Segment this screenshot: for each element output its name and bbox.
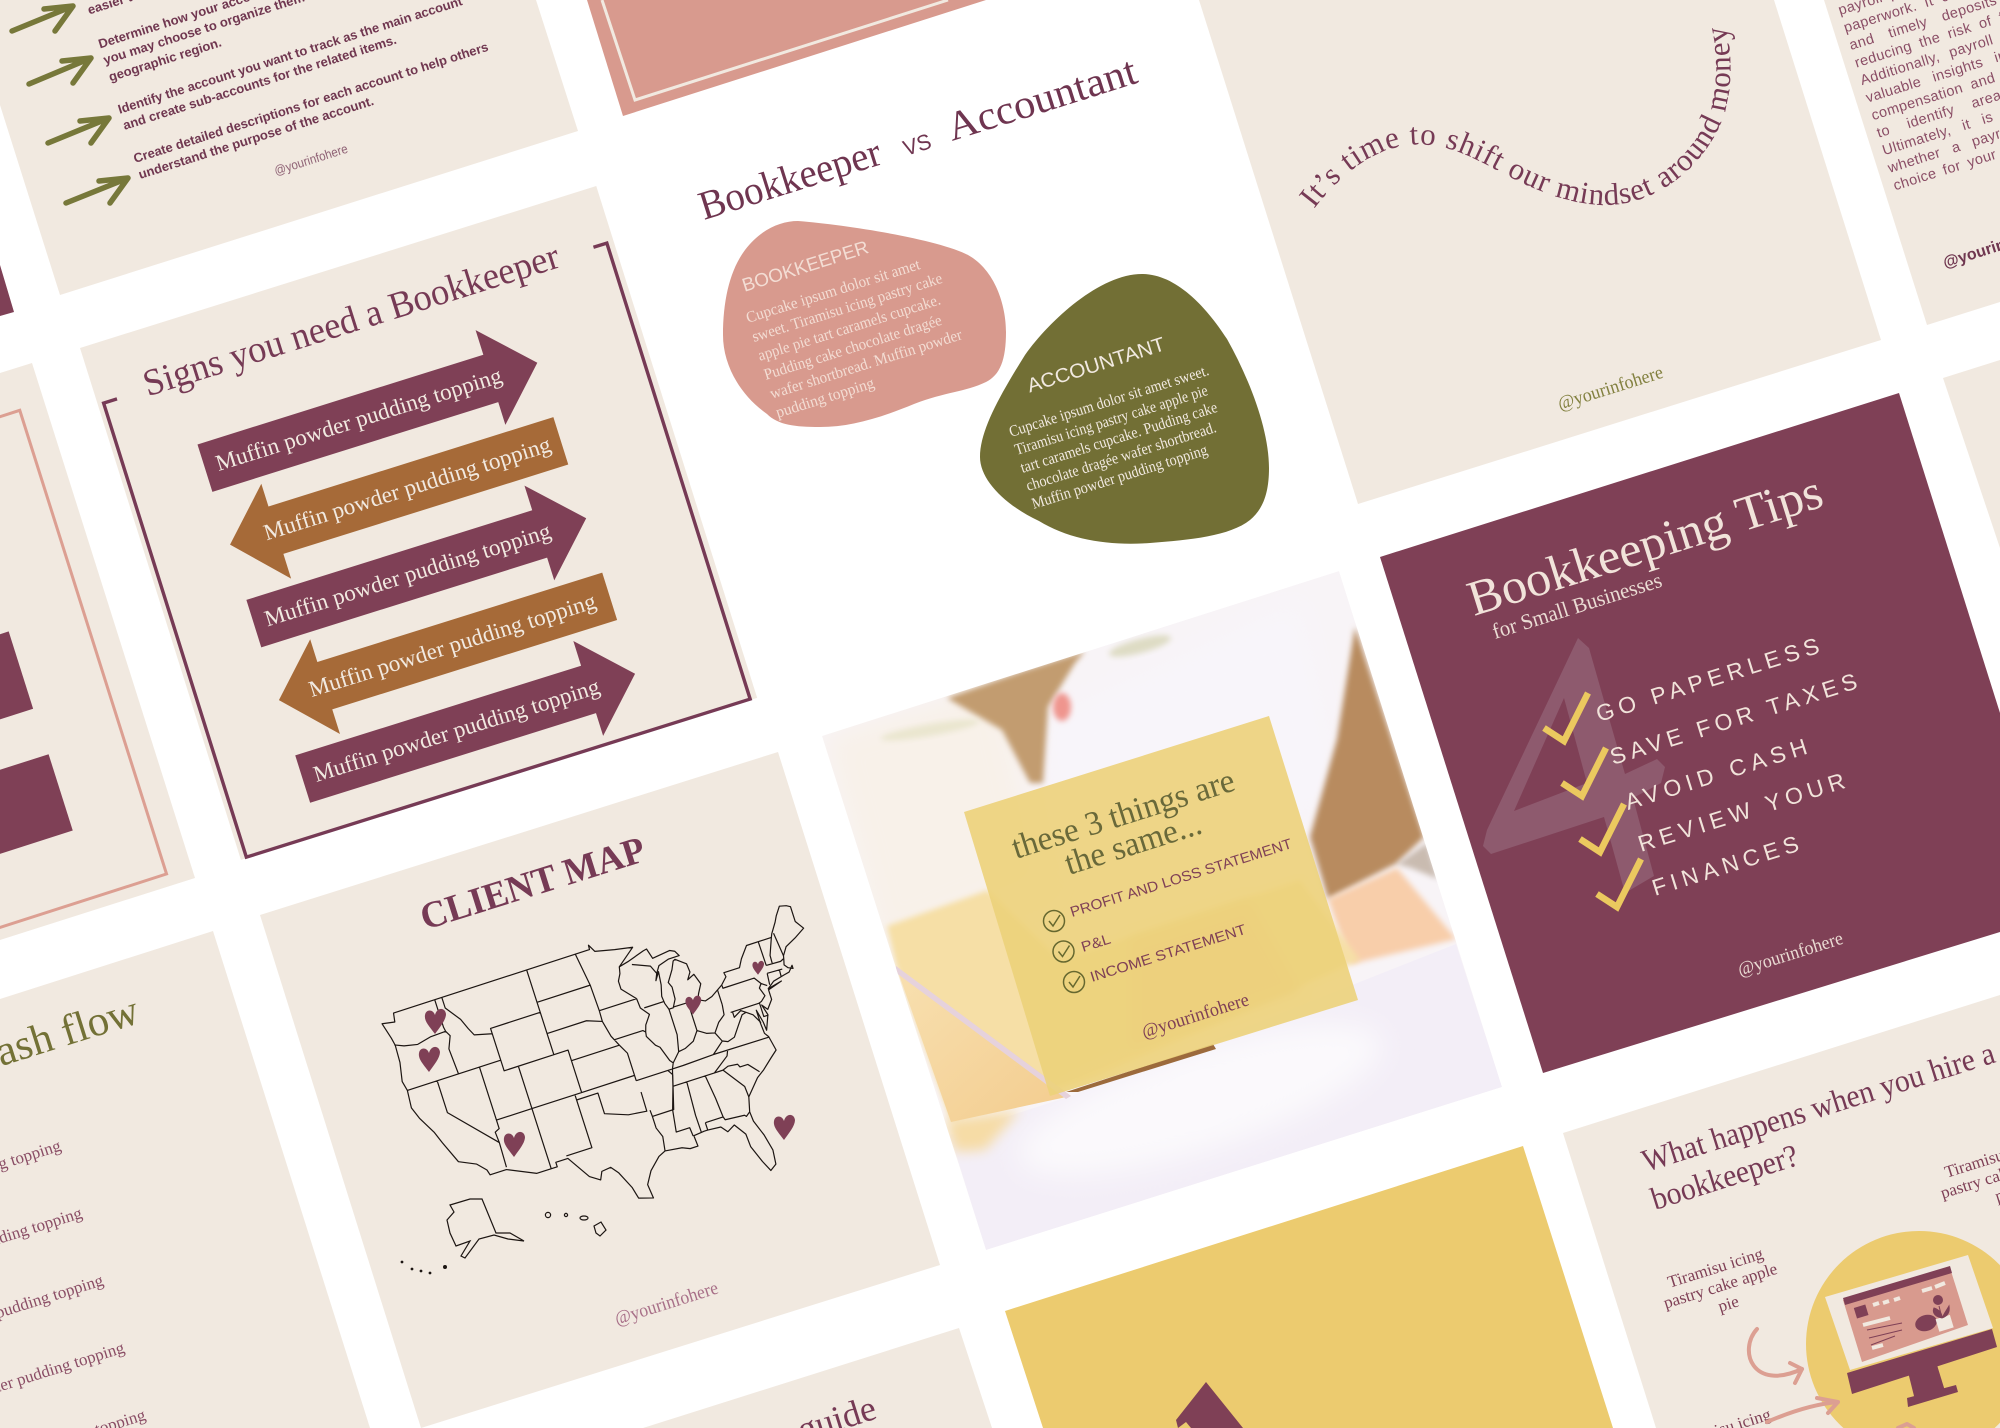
pink blob text xyxy=(734,218,971,422)
panel: photo with checklist xyxy=(822,571,1502,1250)
panel: right edge sliver card xyxy=(1943,360,2000,548)
arrow row 3 xyxy=(239,471,601,670)
maroon shape xyxy=(1176,1382,1243,1428)
pink blob text: Pudding cake chocolate dragée xyxy=(762,312,944,384)
panel: bookkeeper vs accountant xyxy=(693,48,1269,544)
pink blob text: sweet. Tiramisu icing pastry cake xyxy=(750,270,944,346)
overlay checklist: P&L xyxy=(1079,932,1113,956)
tips checks xyxy=(1544,693,1641,907)
tips title: Bookkeeping Tips xyxy=(1461,464,1829,626)
overlay checklist xyxy=(1068,836,1294,986)
list text: Create detailed descriptions for each account to help others xyxy=(132,39,490,166)
title xyxy=(693,48,1143,229)
tips list: REVIEW YOUR xyxy=(1635,768,1848,857)
client map heading: CLIENT MAP xyxy=(415,829,650,939)
yellow overlay xyxy=(964,716,1358,1096)
illustration circle xyxy=(1806,1231,2000,1428)
arrow row 1 xyxy=(190,315,552,515)
list text: @yourinfohere xyxy=(272,141,350,178)
callout text left: pastry cake apple xyxy=(1661,1259,1780,1312)
upper block xyxy=(0,631,33,806)
olive blob text: Muffin powder pudding topping xyxy=(1030,442,1210,513)
olive blob text: tart caramels cupcake. Pudding cake xyxy=(1018,399,1219,477)
check circles xyxy=(1044,910,1084,992)
tips handle: @yourinfohere xyxy=(1735,928,1846,981)
title: VS xyxy=(900,129,934,161)
monitor illustration xyxy=(1825,1255,1997,1407)
overlay checklist: INCOME STATEMENT xyxy=(1088,922,1248,986)
tips subtitle: for Small Businesses xyxy=(1489,567,1665,644)
panel: pink top card xyxy=(587,0,986,116)
pink blob text: Cupcake ipsum dolor sit amet xyxy=(744,256,923,327)
arrow row 1: Muffin powder pudding topping xyxy=(213,363,505,476)
arrow row 3: Muffin powder pudding topping xyxy=(261,518,554,631)
blurred photo background xyxy=(822,571,1502,1250)
Alaska and Hawaii xyxy=(401,1199,606,1274)
client map handle: @yourinfohere xyxy=(612,1278,721,1330)
panel: pink outline card xyxy=(0,363,195,1023)
arrow row 5 xyxy=(287,626,650,826)
olive blob text: ACCOUNTANT xyxy=(1025,334,1168,397)
pink blob text: apple pie tart caramels cupcake. xyxy=(756,292,943,365)
panel: what happens when you hire a bookkeeper xyxy=(1563,995,2000,1428)
inner outline xyxy=(0,410,167,1023)
pink blob text: BOOKKEEPER xyxy=(740,237,871,297)
map hearts xyxy=(419,961,795,1157)
tips list: GO PAPERLESS xyxy=(1593,632,1822,727)
overlay checklist: PROFIT AND LOSS STATEMENT xyxy=(1068,836,1294,921)
olive blob text xyxy=(995,323,1234,513)
arrow row 2 xyxy=(215,394,576,593)
title: Accountant xyxy=(941,48,1143,150)
overlay headline: the same... xyxy=(1060,805,1206,883)
handle: @yourinfohere xyxy=(1555,362,1666,415)
callout text left: Tiramisu icing xyxy=(1665,1244,1766,1292)
tips list: FINANCES xyxy=(1649,830,1802,901)
list text: and create sub-accounts for the related items. xyxy=(121,32,398,133)
list arrows xyxy=(12,6,128,203)
panel: cash flow list xyxy=(0,931,370,1428)
curved arrow xyxy=(1749,1329,1914,1428)
panel: signs you need a bookkeeper xyxy=(80,186,757,860)
overlay handle: @yourinfohere xyxy=(1139,989,1252,1043)
frame xyxy=(103,243,750,857)
panel: guide card xyxy=(643,1328,992,1428)
callout text left: pie xyxy=(1716,1292,1741,1316)
panel: accounts list card xyxy=(0,0,578,295)
curved quote path xyxy=(1314,22,1730,209)
olive blob text: Cupcake ipsum dolor sit amet sweet. xyxy=(1007,362,1211,441)
list text: geographic region. xyxy=(107,35,223,84)
maroon block on far-left card xyxy=(0,265,14,316)
arrow row 4 xyxy=(264,550,625,748)
olive blob text: Tiramisu icing pastry cake apple pie xyxy=(1013,382,1210,459)
pink blob xyxy=(723,221,1006,427)
cash flow rows xyxy=(0,1136,148,1428)
panel: payroll text card xyxy=(1824,0,2000,325)
list text xyxy=(85,0,530,218)
panel: yellow card xyxy=(1005,1146,1613,1428)
olive blob xyxy=(980,274,1269,544)
olive blob text: chocolate dragée wafer shortbread. xyxy=(1024,419,1218,495)
tips list xyxy=(1593,632,1860,901)
pink blob text: pudding topping xyxy=(774,375,877,422)
panel: client map xyxy=(260,752,940,1428)
pink blob text: wafer shortbread. Muffin powder xyxy=(768,326,965,403)
list text: understand the purpose of the account. xyxy=(137,93,376,182)
heading: Signs you need a Bookkeeper xyxy=(138,235,565,405)
overlay headline: these 3 things are xyxy=(1007,762,1239,867)
big numeral 4 xyxy=(1483,638,1665,893)
quote text: It’s time to shift our mindset around money xyxy=(1298,28,1735,208)
lower block xyxy=(0,754,73,928)
US map outline xyxy=(379,880,871,1271)
question heading: bookkeeper? xyxy=(1647,1138,1802,1217)
arrow row 2: Muffin powder pudding topping xyxy=(261,432,554,545)
tips list: SAVE FOR TAXES xyxy=(1607,668,1860,770)
arrow row 5: Muffin powder pudding topping xyxy=(310,674,603,787)
arrow row 4: Muffin powder pudding topping xyxy=(306,588,599,702)
panel: bookkeeping tips xyxy=(1380,393,2000,1073)
tips list: AVOID CASH xyxy=(1622,733,1810,815)
payroll body copy xyxy=(1835,0,2000,194)
panel: shift our mindset quote xyxy=(1199,0,1881,504)
title: Bookkeeper xyxy=(693,129,887,229)
